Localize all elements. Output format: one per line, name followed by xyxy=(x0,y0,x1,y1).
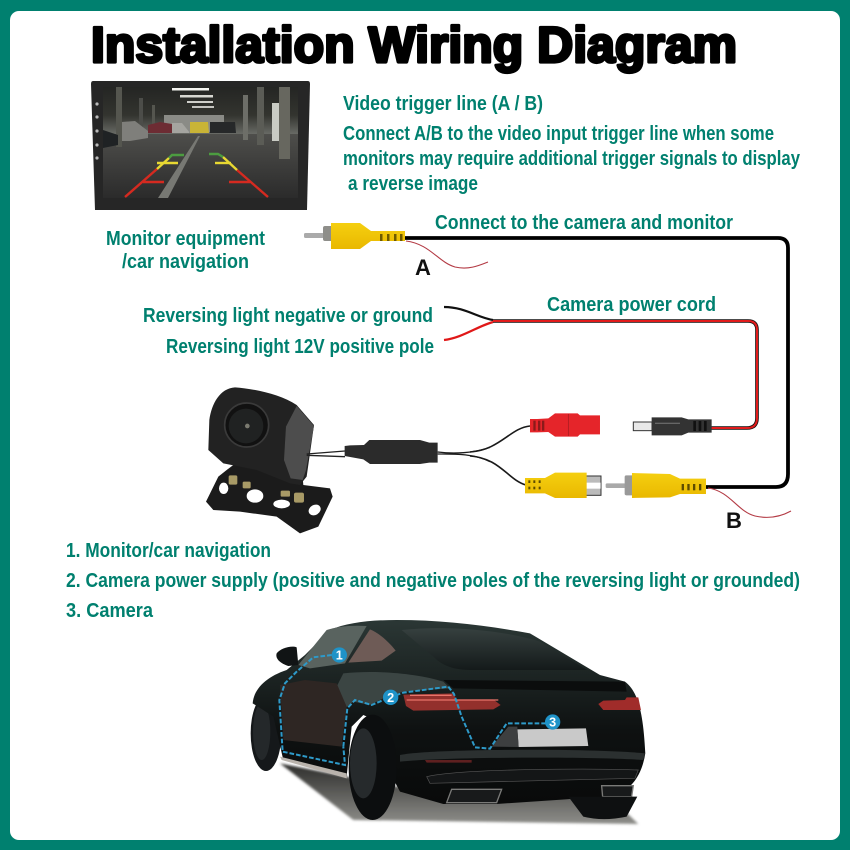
mirror xyxy=(276,647,298,666)
car shadow xyxy=(280,763,638,824)
number badge 1: 1 xyxy=(336,649,343,663)
door panel xyxy=(280,680,347,747)
thin red trigger wire A xyxy=(406,241,488,268)
side skirt xyxy=(280,757,347,778)
title: Installation Wiring Diagram xyxy=(91,17,737,73)
rear wheels xyxy=(568,797,637,819)
label: monitor equipment xyxy=(106,228,265,273)
letter B: B xyxy=(726,508,742,533)
text block: video trigger line: a reverse image xyxy=(348,173,478,195)
car illustration xyxy=(251,620,645,824)
connector A: yellow RCA plug xyxy=(304,223,405,249)
number badge 2: 2 xyxy=(387,691,394,705)
connector B: yellow RCA plug xyxy=(606,473,706,498)
number badge 3 xyxy=(545,714,560,730)
list: installation points: 1. Monitor/car navigation xyxy=(66,540,271,562)
side windows xyxy=(298,626,367,668)
tail lights xyxy=(403,693,501,711)
rear window xyxy=(402,628,587,670)
text block: video trigger line: Connect A/B to the video input trigger line when some xyxy=(343,123,774,145)
dashed wiring route xyxy=(279,655,547,765)
label: monitor equipment: Monitor equipment xyxy=(106,228,265,250)
body xyxy=(253,620,645,804)
label: reversing light negative: Reversing light negative or ground xyxy=(143,305,433,327)
bumper and exhausts xyxy=(400,750,645,762)
number badge 3: 3 xyxy=(549,716,556,730)
front wheel xyxy=(251,696,281,771)
monitor image xyxy=(91,81,310,210)
label: reversing light positive: Reversing light 12V positive pole xyxy=(166,336,434,358)
camera xyxy=(206,387,490,533)
number badge 2 xyxy=(383,690,398,705)
text block: video trigger line xyxy=(343,93,801,195)
connector: black DC plug xyxy=(633,417,712,435)
trunk lip xyxy=(443,680,627,692)
power cord wires xyxy=(444,307,757,428)
text block: video trigger line: Video trigger line (A / B) xyxy=(343,93,543,115)
thin red trigger wire B xyxy=(708,488,791,517)
list: installation points xyxy=(66,540,800,622)
connector: red female xyxy=(530,413,600,437)
license plate xyxy=(517,728,588,747)
split wires from camera to connectors xyxy=(470,426,530,485)
number badge 1 xyxy=(332,647,347,663)
label: camera power cord: Camera power cord xyxy=(547,294,716,316)
connector: yellow female RCA xyxy=(525,473,601,498)
label: monitor equipment: /car navigation xyxy=(122,251,249,273)
letter A: A xyxy=(415,255,431,280)
label: connect to camera and monitor: Connect to the camera and monitor xyxy=(435,212,733,234)
list: installation points: 3. Camera xyxy=(66,600,154,622)
video cable: black line A to B xyxy=(405,238,788,487)
rear haunch highlight xyxy=(337,672,450,708)
